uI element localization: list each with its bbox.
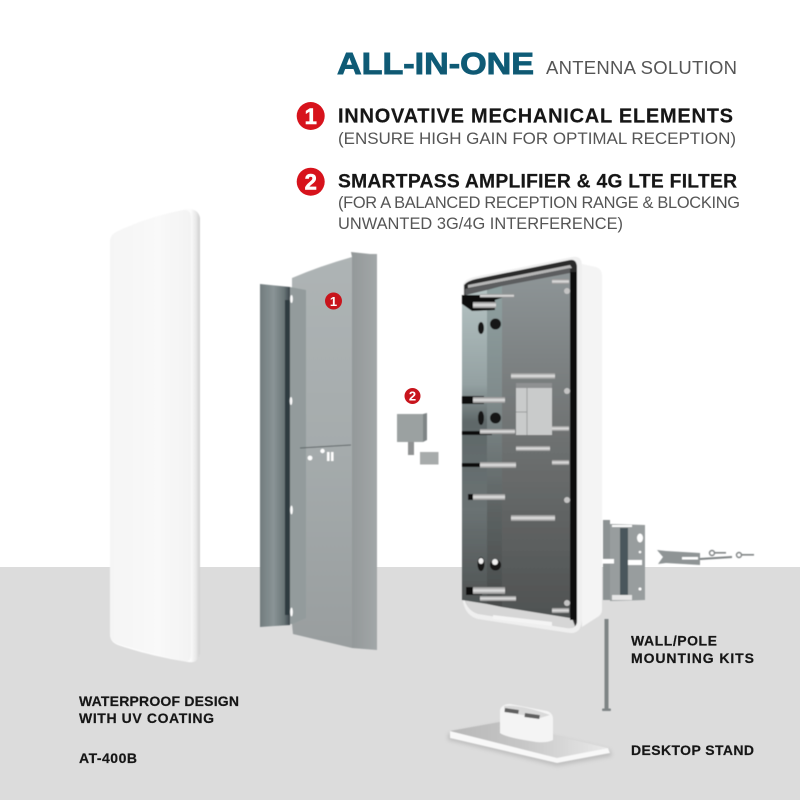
- feature 1 description: (ENSURE HIGH GAIN FOR OPTIMAL RECEPTION): [338, 129, 736, 148]
- light inner line at top of rim: [468, 265, 572, 288]
- front cover panel: [110, 209, 200, 662]
- dark rim: [464, 260, 577, 628]
- amplifier and filter module: [397, 413, 438, 464]
- grey upper lip: [465, 268, 570, 296]
- grey lower lip: [465, 600, 575, 628]
- interior left section: [462, 290, 487, 604]
- bracket: [603, 520, 645, 601]
- black inner stripe: [570, 272, 577, 620]
- desktop stand: [448, 704, 612, 766]
- label: waterproof design: [79, 693, 239, 726]
- metal reflector element: [260, 252, 377, 650]
- icon: badge 2 above amplifier: 2: [409, 389, 416, 404]
- right side face: [351, 252, 377, 650]
- mounting pins: [473, 279, 569, 613]
- feature 2 heading: SMARTPASS AMPLIFIER & 4G LTE FILTER: [338, 172, 737, 193]
- clamp plate: [657, 550, 700, 565]
- icon: red number badge 1: [297, 102, 325, 130]
- holes: [308, 456, 312, 460]
- feature 2 description: UNWANTED 3G/4G INTERFERENCE): [338, 215, 623, 233]
- icon: badge 1 on metal element: 1: [330, 294, 337, 309]
- fold line: [300, 445, 351, 448]
- floor background: [0, 567, 800, 800]
- label: wall pole mounting kits: [631, 633, 754, 666]
- antenna housing: [462, 257, 602, 633]
- label: desktop stand: DESKTOP STAND: [631, 742, 754, 758]
- paired holes: [478, 318, 501, 425]
- label: wall pole mounting kits: MOUNTING KITS: [631, 650, 754, 666]
- icon: badge 1 on metal element: [325, 292, 342, 310]
- inner strip: [290, 287, 306, 624]
- feature 2 description: [338, 194, 740, 233]
- icon: red number badge 1: 1: [305, 104, 317, 129]
- title: ALL-IN-ONE: [337, 46, 534, 81]
- wall pole mounting kit: [603, 520, 754, 601]
- left flap: [260, 284, 290, 627]
- eye bolts: [710, 550, 714, 556]
- rim pins: [564, 288, 570, 606]
- feature 2: [297, 168, 740, 233]
- interior back wall: [502, 273, 570, 618]
- riser: [500, 704, 553, 742]
- icon: badge 2 above amplifier: [404, 388, 420, 404]
- title: [337, 46, 737, 81]
- feature 1 heading: INNOVATIVE MECHANICAL ELEMENTS: [338, 106, 733, 128]
- label: wall pole mounting kits: WALL/POLE: [631, 633, 717, 649]
- lower hole pair with highlights: [478, 557, 501, 571]
- label: model number: AT-400B: [79, 750, 137, 766]
- icon: red number badge 2: 2: [305, 170, 317, 195]
- icon: red number badge 2: [297, 168, 325, 196]
- base top face: [450, 722, 608, 758]
- base front edge: [450, 731, 610, 763]
- window: [516, 383, 552, 435]
- long mounting screw: [602, 619, 611, 711]
- feature 2 description: (FOR A BALANCED RECEPTION RANGE & BLOCKING: [338, 194, 740, 212]
- dark rear channel: [285, 300, 290, 615]
- white bottom tab: [493, 615, 552, 626]
- outer white body: [582, 264, 602, 627]
- interior middle section: [487, 286, 502, 607]
- main front face: [292, 257, 352, 648]
- white frame: [463, 257, 582, 633]
- feature 1: [297, 102, 736, 148]
- label: waterproof design: WATERPROOF DESIGN: [79, 693, 239, 709]
- title: ANTENNA SOLUTION: [546, 57, 737, 78]
- label: waterproof design: WITH UV COATING: [79, 710, 214, 726]
- dark shelves: [462, 295, 510, 595]
